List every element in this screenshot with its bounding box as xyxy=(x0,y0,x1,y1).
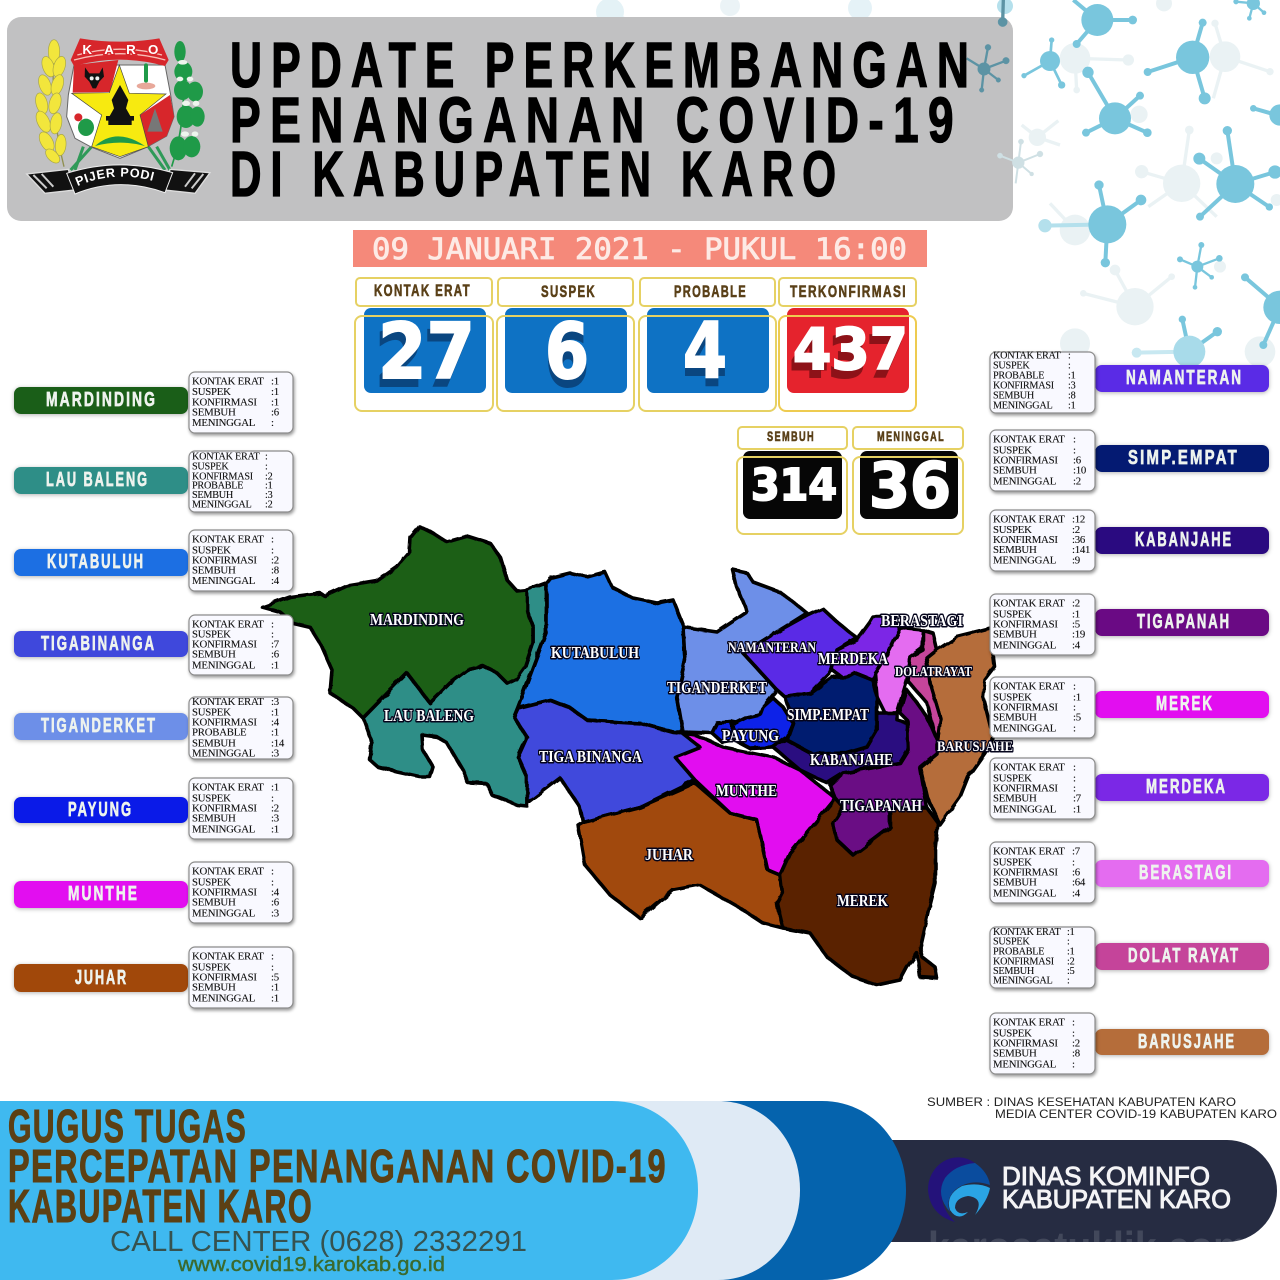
region: Lau Baleng xyxy=(363,583,546,806)
district: Juhar: : xyxy=(271,951,274,963)
district: Kabanjahe: :9 xyxy=(1072,555,1080,567)
stat: suspek: 6 xyxy=(545,316,589,405)
map labels: LAU BALENG xyxy=(384,706,474,725)
district: Lau Baleng: KONTAK ERAT xyxy=(192,452,259,463)
region: Kutabuluh xyxy=(518,572,685,732)
district: Berastagi: : xyxy=(1072,857,1075,869)
district: Tigabinanga: : xyxy=(271,619,274,631)
district: Lau Baleng: :2 xyxy=(265,472,273,483)
district: Kutabuluh: MENINGGAL xyxy=(192,575,255,587)
district: Merdeka: :7 xyxy=(1073,793,1082,805)
district: Kutabuluh: : xyxy=(271,534,274,546)
district: Barusjahe: : xyxy=(1072,1059,1075,1071)
district: Munthe xyxy=(14,862,293,923)
source note xyxy=(927,1095,1277,1121)
district: Merdeka: MERDEKA xyxy=(1146,776,1227,798)
icon: cotton branch xyxy=(170,41,205,167)
district: Mardinding xyxy=(14,372,293,433)
website: www.covid19.karokab.go.id xyxy=(177,1254,445,1276)
region: Payung small xyxy=(712,722,733,742)
map labels: KABANJAHE xyxy=(810,750,893,769)
map labels: DOLATRAYAT xyxy=(895,665,973,680)
district: Tiganderket: KONFIRMASI xyxy=(192,717,257,729)
date banner: 09 JANUARI 2021 - PUKUL 16:00 xyxy=(372,232,907,266)
district: Tiganderket: :3 xyxy=(271,696,279,708)
district: Juhar: JUHAR xyxy=(75,967,128,989)
district: Namanteran: SEMBUH xyxy=(993,391,1034,402)
stat: kontak erat: KONTAK ERAT xyxy=(374,281,471,300)
district: Kabanjahe: SEMBUH xyxy=(993,544,1036,556)
district: Payung: KONFIRMASI xyxy=(192,803,257,815)
footer heading xyxy=(8,1100,667,1232)
stat: sembuh: 314 xyxy=(751,460,837,511)
district: Tigapanah: MENINGGAL xyxy=(993,640,1056,652)
district: Kabanjahe xyxy=(990,510,1269,571)
district: Berastagi: KONTAK ERAT xyxy=(993,846,1065,858)
district: Merek: SUSPEK xyxy=(993,692,1032,704)
district: Dolat Rayat: SUSPEK xyxy=(993,937,1029,948)
district: Dolat Rayat: PROBABLE xyxy=(993,947,1044,958)
map labels: MEREK xyxy=(837,891,889,910)
stat: probable: 4 xyxy=(683,315,727,404)
region: Tiga Binanga xyxy=(514,700,700,822)
district: Tigabinanga: KONTAK ERAT xyxy=(192,619,264,631)
district: Kutabuluh: :2 xyxy=(271,555,279,567)
title: UPDATE PERKEMBANGAN xyxy=(230,29,978,101)
district: Tiganderket: :1 xyxy=(271,707,279,719)
district: Barusjahe: MENINGGAL xyxy=(993,1059,1056,1071)
district: Berastagi: KONFIRMASI xyxy=(993,867,1058,879)
district: Tigabinanga: :6 xyxy=(271,649,280,661)
district: Kutabuluh: SUSPEK xyxy=(192,545,231,557)
stat: kontak erat: 27 xyxy=(378,308,475,397)
title: PENANGANAN COVID-19 xyxy=(230,84,963,156)
district: Simp. Empat: : xyxy=(1073,434,1076,446)
district: Namanteran: MENINGGAL xyxy=(993,401,1052,412)
district: Merek: KONTAK ERAT xyxy=(993,681,1065,693)
district: Munthe: MENINGGAL xyxy=(192,908,255,920)
district: Lau Baleng: MENINGGAL xyxy=(192,500,251,511)
district: Kutabuluh xyxy=(14,530,293,591)
district: Payung: SUSPEK xyxy=(192,793,231,805)
stat: sembuh: SEMBUH xyxy=(767,429,815,444)
district: Mardinding: KONFIRMASI xyxy=(192,397,257,409)
map labels: JUHAR xyxy=(645,845,694,864)
footer panel: Dinas Kominfo: DINAS KOMINFO xyxy=(1002,1161,1210,1191)
district: Payung xyxy=(14,778,293,839)
district: Tigapanah: SUSPEK xyxy=(993,609,1032,621)
district: Barusjahe: KONFIRMASI xyxy=(993,1038,1058,1050)
district: Payung: : xyxy=(271,793,274,805)
district: Berastagi: :4 xyxy=(1072,888,1081,900)
district: Juhar: SUSPEK xyxy=(192,962,231,974)
district: Lau Baleng: :1 xyxy=(265,481,273,492)
district: Kutabuluh: :8 xyxy=(271,565,279,577)
district: Barusjahe: :2 xyxy=(1072,1038,1080,1050)
stat: suspek xyxy=(497,278,634,411)
district: Merdeka: SUSPEK xyxy=(993,773,1032,785)
district: Berastagi: SUSPEK xyxy=(993,857,1032,869)
region: Tigapanah xyxy=(830,690,937,855)
district: Payung: SEMBUH xyxy=(192,813,236,825)
district: Lau Baleng: KONFIRMASI xyxy=(192,472,253,483)
district: Tiganderket: SEMBUH xyxy=(192,738,236,750)
map labels: KUTABULUH xyxy=(551,643,639,662)
footer panel: Dinas Kominfo: KABUPATEN KARO xyxy=(1002,1184,1231,1214)
district: Kabanjahe: KONFIRMASI xyxy=(993,534,1058,546)
stat: kontak erat xyxy=(355,278,493,411)
district: Barusjahe: : xyxy=(1072,1028,1075,1040)
stat: suspek: SUSPEK xyxy=(541,282,596,301)
map labels: MERDEKA xyxy=(818,649,889,668)
district: Mardinding: KONTAK ERAT xyxy=(192,376,264,388)
district: Kutabuluh: : xyxy=(271,545,274,557)
district: Tiganderket: :14 xyxy=(271,738,285,750)
region: Munthe xyxy=(675,733,835,875)
district: Tigabinanga: TIGABINANGA xyxy=(41,633,156,655)
region: Tiganderket xyxy=(677,570,807,733)
district: Merdeka xyxy=(990,758,1269,819)
district: Tigapanah: SEMBUH xyxy=(993,629,1036,641)
map labels: BERASTAGI xyxy=(881,611,963,630)
district: Berastagi: :7 xyxy=(1072,846,1081,858)
map labels: TIGAPANAH xyxy=(840,796,922,815)
logo: Kabupaten Karo emblem xyxy=(26,38,211,194)
district: Namanteran: KONFIRMASI xyxy=(993,381,1054,392)
background: faint molecules above header xyxy=(596,0,1013,35)
district: Berastagi xyxy=(990,842,1269,903)
district: Dolat Rayat: KONFIRMASI xyxy=(993,957,1054,968)
district: Dolat Rayat: : xyxy=(1067,937,1070,948)
district: Juhar: :5 xyxy=(271,972,279,984)
district: Juhar: :1 xyxy=(271,982,279,994)
district: Barusjahe: KONTAK ERAT xyxy=(993,1017,1065,1029)
district: Tigapanah: :4 xyxy=(1072,640,1081,652)
district: Merdeka: : xyxy=(1073,762,1076,774)
district: Mardinding: MENINGGAL xyxy=(192,417,255,429)
district: Lau Baleng xyxy=(14,451,293,512)
district: Barusjahe: :8 xyxy=(1072,1048,1080,1060)
district: Munthe: MUNTHE xyxy=(68,883,139,905)
district: Juhar: KONFIRMASI xyxy=(192,972,257,984)
district: Payung: :3 xyxy=(271,813,279,825)
district: Merek: : xyxy=(1073,702,1076,714)
district: Tigapanah: KONFIRMASI xyxy=(993,619,1058,631)
district: Mardinding: :1 xyxy=(271,386,279,398)
district: Juhar xyxy=(14,947,293,1008)
district: Merdeka: KONFIRMASI xyxy=(993,783,1058,795)
district: Munthe: SEMBUH xyxy=(192,897,236,909)
district: Juhar: :1 xyxy=(271,993,279,1005)
district: Lau Baleng: :3 xyxy=(265,490,273,501)
source note: MEDIA CENTER COVID-19 KABUPATEN KARO xyxy=(995,1107,1277,1121)
district: Dolat Rayat: :2 xyxy=(1067,957,1075,968)
district: Barusjahe xyxy=(990,1013,1269,1074)
district: Namanteran: : xyxy=(1068,361,1071,372)
district: Merdeka: :1 xyxy=(1073,804,1081,816)
banner: KARO: KARO xyxy=(82,42,158,57)
district: Simp. Empat: :10 xyxy=(1073,465,1086,477)
district: Lau Baleng: SEMBUH xyxy=(192,490,233,501)
district: Namanteran: SUSPEK xyxy=(993,361,1029,372)
call center: CALL CENTER (0628) 2332291 xyxy=(110,1226,527,1258)
district: Dolat Rayat: MENINGGAL xyxy=(993,976,1052,987)
district: Namanteran: :1 xyxy=(1068,401,1076,412)
district: Merek: MENINGGAL xyxy=(993,723,1056,735)
stat: meninggal: MENINGGAL xyxy=(877,429,945,444)
banner: KARO xyxy=(71,38,169,66)
district: Kutabuluh: KONFIRMASI xyxy=(192,555,257,567)
district: Kabanjahe: KONTAK ERAT xyxy=(993,514,1065,526)
district: Payung: MENINGGAL xyxy=(192,824,255,836)
district: Payung: :2 xyxy=(271,803,279,815)
district: Tigabinanga: SEMBUH xyxy=(192,649,236,661)
map labels: NAMANTERAN xyxy=(728,640,816,656)
district: Namanteran: KONTAK ERAT xyxy=(993,351,1060,362)
district: Tigabinanga: :7 xyxy=(271,639,280,651)
district: Simp. Empat: SIMP.EMPAT xyxy=(1128,447,1239,469)
region: Juhar xyxy=(578,783,783,928)
district: Merek: :1 xyxy=(1073,692,1081,704)
district: Dolat Rayat: SEMBUH xyxy=(993,966,1034,977)
district: Tigabinanga xyxy=(14,615,293,675)
district: Kutabuluh: :4 xyxy=(271,575,280,587)
region: Dolat Rayat xyxy=(907,630,940,740)
district: Payung: KONTAK ERAT xyxy=(192,782,264,794)
region: Mardinding xyxy=(262,526,533,718)
district: Mardinding: :1 xyxy=(271,376,279,388)
district: Mardinding: :1 xyxy=(271,397,279,409)
district: Barusjahe: SEMBUH xyxy=(993,1048,1036,1060)
district: Tigabinanga: SUSPEK xyxy=(192,629,231,641)
district: Merek: :5 xyxy=(1073,712,1081,724)
district: Simp. Empat: SUSPEK xyxy=(993,445,1032,457)
ribbon: PIJER PODI xyxy=(26,164,211,194)
footer heading: PERCEPATAN PENANGANAN COVID-19 xyxy=(8,1140,667,1192)
district: Merek: MEREK xyxy=(1156,693,1214,715)
district: Berastagi: MENINGGAL xyxy=(993,888,1056,900)
district: Tigabinanga: :1 xyxy=(271,660,279,672)
map labels: TIGA BINANGA xyxy=(539,747,643,766)
district: Munthe: KONTAK ERAT xyxy=(192,866,264,878)
district: Merek xyxy=(990,677,1269,738)
district: Merdeka: KONTAK ERAT xyxy=(993,762,1065,774)
district: Merdeka: : xyxy=(1073,773,1076,785)
district: Kutabuluh: KONTAK ERAT xyxy=(192,534,264,546)
icon: Kominfo logo xyxy=(928,1157,990,1222)
district: Berastagi: :64 xyxy=(1072,877,1086,889)
header panel xyxy=(7,0,1043,221)
stat: terkonfirmasi: 437 xyxy=(790,325,905,391)
district: Namanteran xyxy=(990,351,1269,413)
district: Munthe: :4 xyxy=(271,887,280,899)
district: Tigapanah: TIGAPANAH xyxy=(1137,611,1231,633)
district: Tiganderket: MENINGGAL xyxy=(192,748,255,760)
watermark: karosatuklik.com xyxy=(928,1223,1248,1272)
district: Dolat Rayat xyxy=(990,927,1269,988)
district: Mardinding: SUSPEK xyxy=(192,386,231,398)
ribbon: PIJER PODI: PIJER PODI xyxy=(75,168,154,186)
district: Simp. Empat: SEMBUH xyxy=(993,465,1036,477)
district: Kabanjahe: :36 xyxy=(1072,534,1086,546)
region: Berastagi xyxy=(875,628,923,713)
stat: probable: PROBABLE xyxy=(674,282,747,301)
district: Tigapanah: :2 xyxy=(1072,598,1080,610)
district: Lau Baleng: : xyxy=(265,452,268,463)
district: Lau Baleng: PROBABLE xyxy=(192,481,243,492)
district: Tigabinanga: MENINGGAL xyxy=(192,660,255,672)
icon: crossed stems xyxy=(71,147,170,170)
district: Kabanjahe: :141 xyxy=(1072,544,1090,556)
region: Merdeka xyxy=(832,617,900,680)
stat: meninggal: 36 xyxy=(869,449,951,522)
district: Munthe: :6 xyxy=(271,897,280,909)
district: Tiganderket xyxy=(14,696,293,760)
stat: terkonfirmasi: TERKONFIRMASI xyxy=(790,282,907,301)
district: Berastagi: :6 xyxy=(1072,867,1081,879)
district: Merdeka: MENINGGAL xyxy=(993,804,1056,816)
district: Simp. Empat: :2 xyxy=(1073,476,1081,488)
stat: kontak erat: 27 xyxy=(375,316,472,405)
source note: SUMBER : DINAS KESEHATAN KABUPATEN KARO xyxy=(927,1095,1236,1109)
stat: probable: 4 xyxy=(683,307,727,396)
district: Namanteran: :8 xyxy=(1068,391,1076,402)
district: Tiganderket: :4 xyxy=(271,717,280,729)
footer heading: KABUPATEN KARO xyxy=(8,1180,313,1232)
district: Tigapanah: :5 xyxy=(1072,619,1080,631)
district: Simp. Empat: : xyxy=(1073,445,1076,457)
district: Merdeka: SEMBUH xyxy=(993,793,1036,805)
region: Barusjahe xyxy=(920,628,995,825)
district: Merek: : xyxy=(1073,681,1076,693)
district: Dolat Rayat: : xyxy=(1067,976,1070,987)
district: Berastagi: BERASTAGI xyxy=(1139,862,1233,884)
district: Payung: :1 xyxy=(271,824,279,836)
district: Munthe: KONFIRMASI xyxy=(192,887,257,899)
district: Juhar: SEMBUH xyxy=(192,982,236,994)
district: Namanteran: : xyxy=(1068,351,1071,362)
district: Namanteran: :1 xyxy=(1068,371,1076,382)
district: Mardinding: MARDINDING xyxy=(46,389,157,411)
district: Juhar: : xyxy=(271,962,274,974)
district: Tiganderket: SUSPEK xyxy=(192,707,231,719)
stat: probable xyxy=(639,278,776,411)
district: Tiganderket: KONTAK ERAT xyxy=(192,696,264,708)
footer curved bands xyxy=(0,1101,906,1280)
district: Munthe: : xyxy=(271,866,274,878)
district: Tigapanah: KONTAK ERAT xyxy=(993,598,1065,610)
title: DI KABUPATEN KARO xyxy=(230,138,845,210)
icon: shield xyxy=(67,60,174,158)
district: Munthe: :3 xyxy=(271,908,279,920)
stat: meninggal xyxy=(853,427,963,534)
district: Payung: PAYUNG xyxy=(68,799,133,821)
district: Kutabuluh: SEMBUH xyxy=(192,565,236,577)
district: Barusjahe: SUSPEK xyxy=(993,1028,1032,1040)
district: Lau Baleng: :2 xyxy=(265,500,273,511)
district: Dolat Rayat: KONTAK ERAT xyxy=(993,927,1060,938)
region: Simp. Empat xyxy=(785,672,877,754)
stat: sembuh xyxy=(737,427,847,534)
region: Payung xyxy=(733,698,793,748)
district: Tiganderket: :1 xyxy=(271,727,279,739)
district: Lau Baleng: LAU BALENG xyxy=(46,469,149,491)
district: Simp. Empat: KONTAK ERAT xyxy=(993,434,1065,446)
district: Tigapanah xyxy=(990,594,1269,655)
district: Mardinding: :6 xyxy=(271,407,280,419)
district: Mardinding: : xyxy=(271,417,274,429)
stat: suspek: 6 xyxy=(545,308,589,397)
district: Merek: : xyxy=(1073,723,1076,735)
district: Tigabinanga: KONFIRMASI xyxy=(192,639,257,651)
district: Mardinding: SEMBUH xyxy=(192,407,236,419)
map labels: MARDINDING xyxy=(370,610,464,629)
district: Kabanjahe: :2 xyxy=(1072,524,1080,536)
district: Merek: KONFIRMASI xyxy=(993,702,1058,714)
map labels: BARUSJAHE xyxy=(937,739,1013,755)
district: Barusjahe: : xyxy=(1072,1017,1075,1029)
district: Simp. Empat: KONFIRMASI xyxy=(993,455,1058,467)
district: Dolat Rayat: :5 xyxy=(1067,966,1075,977)
district: Dolat Rayat: :1 xyxy=(1067,947,1075,958)
district: Namanteran: PROBABLE xyxy=(993,371,1044,382)
district: Tigapanah: :19 xyxy=(1072,629,1085,641)
title xyxy=(230,29,978,210)
map labels: MUNTHE xyxy=(716,781,777,800)
district: Kutabuluh: KUTABULUH xyxy=(47,551,145,573)
district: Berastagi: SEMBUH xyxy=(993,877,1036,889)
map labels: TIGANDERKET xyxy=(667,678,768,697)
district: Merek: SEMBUH xyxy=(993,712,1036,724)
region: Namanteran xyxy=(743,608,857,697)
district: Kabanjahe: :12 xyxy=(1072,514,1085,526)
footer panel: Dinas Kominfo xyxy=(850,1140,1277,1272)
district: Juhar: KONTAK ERAT xyxy=(192,951,264,963)
district: Tiganderket: PROBABLE xyxy=(192,727,246,739)
district: Munthe: SUSPEK xyxy=(192,877,231,889)
district: Kabanjahe: MENINGGAL xyxy=(993,555,1056,567)
district: Lau Baleng: SUSPEK xyxy=(192,462,228,473)
district: Simp. Empat: :6 xyxy=(1073,455,1082,467)
district: Tigapanah: :1 xyxy=(1072,609,1080,621)
district: Payung: :1 xyxy=(271,782,279,794)
district: Tiganderket: TIGANDERKET xyxy=(41,715,157,737)
district: Lau Baleng: : xyxy=(265,462,268,473)
region: Kabanjahe xyxy=(773,713,908,783)
district: Simp. Empat: MENINGGAL xyxy=(993,476,1056,488)
stat: terkonfirmasi: 437 xyxy=(793,317,908,383)
icon: rice stalk xyxy=(33,40,68,167)
district: Tigabinanga: : xyxy=(271,629,274,641)
map labels: SIMP.EMPAT xyxy=(787,705,870,724)
district: Dolat Rayat: :1 xyxy=(1067,927,1075,938)
district: Tiganderket: :3 xyxy=(271,748,279,760)
footer heading: GUGUS TUGAS xyxy=(8,1100,247,1152)
background: virus molecules xyxy=(1021,0,1280,368)
map of Karo districts xyxy=(262,526,995,985)
map labels xyxy=(370,610,1013,910)
district: Kabanjahe: SUSPEK xyxy=(993,524,1032,536)
region: Merek xyxy=(777,798,938,985)
map labels: PAYUNG xyxy=(722,726,779,745)
district: Namanteran: :3 xyxy=(1068,381,1076,392)
district: Munthe: : xyxy=(271,877,274,889)
district: Simp. Empat xyxy=(990,430,1269,491)
district: Juhar: MENINGGAL xyxy=(192,993,255,1005)
district: Merdeka: : xyxy=(1073,783,1076,795)
stat: terkonfirmasi xyxy=(779,278,916,411)
